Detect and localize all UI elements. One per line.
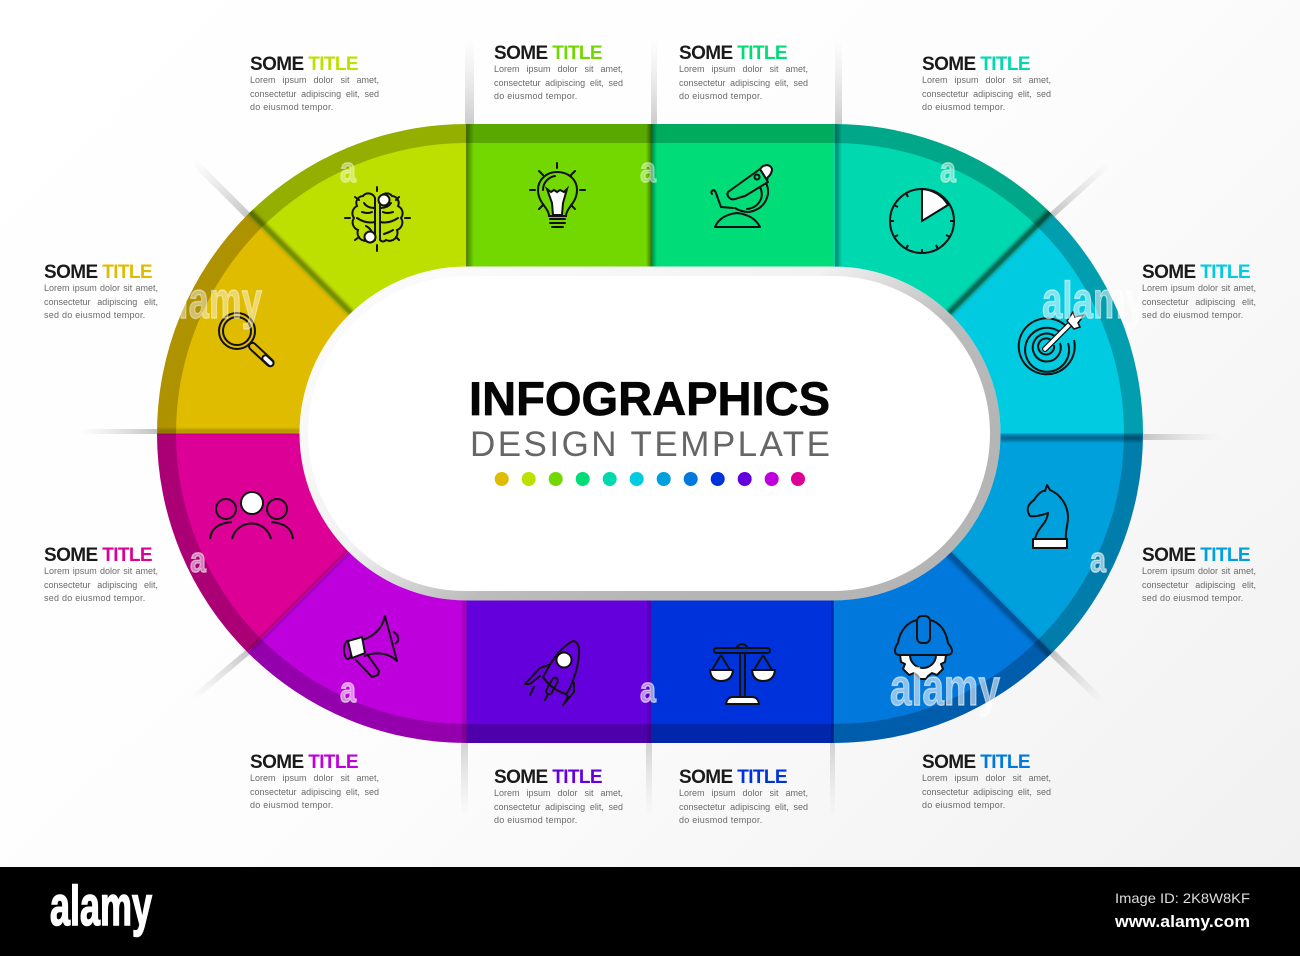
footer bar: www.alamy.com — [1114, 912, 1250, 931]
text block: royal blue — [679, 767, 808, 825]
segment 6: cyan — [952, 215, 1143, 434]
heading: DESIGN TEMPLATE — [470, 425, 830, 464]
text block: teal: do eiusmod tempor. — [922, 102, 1006, 112]
text block: magenta: Lorem ipsum dolor sit amet, — [44, 566, 158, 576]
text block: cyan — [1142, 262, 1256, 320]
outer shadow streaks — [80, 40, 1220, 818]
text block: emerald: consectetur adipiscing elit, sed — [679, 78, 808, 88]
text block: emerald: SOME TITLE — [679, 43, 787, 64]
text block: violet: SOME TITLE — [494, 767, 602, 788]
watermarks: a — [640, 149, 657, 190]
icon: brain — [345, 187, 410, 251]
watermarks: a — [1090, 539, 1107, 580]
text block: lime: do eiusmod tempor. — [250, 102, 334, 112]
segment 9: royal blue — [651, 600, 834, 743]
text block: emerald: Lorem ipsum dolor sit amet, — [679, 64, 808, 74]
text block: royal blue: consectetur adipiscing elit, sed — [679, 802, 808, 812]
text block: green: do eiusmod tempor. — [494, 91, 578, 101]
text block: purple: do eiusmod tempor. — [250, 800, 334, 810]
watermarks: alamy — [158, 272, 262, 330]
icon: clock — [890, 189, 954, 253]
text block: lime: SOME TITLE — [250, 54, 358, 75]
text block: magenta: SOME TITLE — [44, 545, 152, 566]
text block: yellow — [44, 262, 158, 320]
text block: royal blue: Lorem ipsum dolor sit amet, — [679, 788, 808, 798]
text block: cyan: Lorem ipsum dolor sit amet, — [1142, 283, 1256, 293]
colour dots — [495, 472, 805, 486]
text block: lime: consectetur adipiscing elit, sed — [250, 88, 379, 98]
text block: purple — [250, 752, 379, 810]
text block: green: consectetur adipiscing elit, sed — [494, 78, 623, 88]
text block: emerald — [679, 43, 808, 101]
icon: scales — [710, 644, 775, 704]
watermarks — [158, 149, 1146, 717]
text block: lime — [250, 54, 379, 112]
text block: magenta — [44, 545, 158, 603]
text block: blue: consectetur adipiscing elit, sed — [922, 786, 1051, 796]
text block: green: Lorem ipsum dolor sit amet, — [494, 64, 623, 74]
icon: target and arrow — [1019, 312, 1084, 374]
watermarks: a — [940, 149, 957, 190]
icon: light bulb — [530, 163, 585, 227]
text block: blue — [922, 752, 1051, 810]
text block: violet: Lorem ipsum dolor sit amet, — [494, 788, 623, 798]
text block: purple: SOME TITLE — [250, 752, 358, 773]
watermarks: a — [340, 669, 357, 710]
footer bar: Image ID: 2K8W8KF — [1115, 890, 1250, 906]
text block: royal blue: do eiusmod tempor. — [679, 815, 763, 825]
segment 12: magenta — [157, 434, 348, 652]
text block: yellow: consectetur adipiscing elit, — [44, 296, 158, 306]
central white pill — [308, 276, 990, 591]
footer bar — [0, 867, 1300, 956]
heading — [469, 372, 830, 464]
segment 2: lime — [248, 124, 466, 315]
text block: teal: SOME TITLE — [922, 54, 1030, 75]
icon: magnifier — [219, 313, 275, 368]
segment 11: purple — [248, 552, 466, 743]
text block: violet: do eiusmod tempor. — [494, 815, 578, 825]
text block: sky blue: sed do eiusmod tempor. — [1142, 593, 1244, 603]
text block: blue: Lorem ipsum dolor sit amet, — [922, 773, 1051, 783]
text block: yellow: Lorem ipsum dolor sit amet, — [44, 283, 158, 293]
text block: sky blue: SOME TITLE — [1142, 545, 1250, 566]
icon: helmet and gear — [895, 616, 952, 679]
text block: teal: consectetur adipiscing elit, sed — [922, 88, 1051, 98]
footer bar: alamy — [50, 874, 152, 937]
text block: teal — [922, 54, 1051, 112]
text block: purple: consectetur adipiscing elit, sed — [250, 786, 379, 796]
text block: lime: Lorem ipsum dolor sit amet, — [250, 75, 379, 85]
icon: chess knight — [1028, 485, 1068, 548]
text block: cyan: consectetur adipiscing elit, — [1142, 296, 1256, 306]
heading: INFOGRAPHICS — [469, 372, 830, 425]
icon: megaphone — [344, 616, 398, 677]
text block: blue: do eiusmod tempor. — [922, 800, 1006, 810]
inner pill shadow recess — [300, 266, 1001, 600]
text block: blue: SOME TITLE — [922, 752, 1030, 773]
text block: yellow: SOME TITLE — [44, 262, 152, 283]
text block: green — [494, 43, 623, 101]
watermarks: alamy — [1042, 272, 1146, 330]
text block: teal: Lorem ipsum dolor sit amet, — [922, 75, 1051, 85]
watermarks: a — [640, 669, 657, 710]
segment 1: yellow — [157, 215, 348, 434]
segment 4: emerald — [651, 124, 834, 266]
text block: violet — [494, 767, 623, 825]
watermarks: alamy — [890, 659, 1000, 717]
text block: cyan: sed do eiusmod tempor. — [1142, 310, 1244, 320]
text block: green: SOME TITLE — [494, 43, 602, 64]
text block: yellow: sed do eiusmod tempor. — [44, 310, 146, 320]
segment 7: sky blue — [952, 434, 1143, 652]
segment 3: green — [466, 124, 651, 266]
icon: rocket — [525, 641, 579, 705]
darker outer band — [157, 124, 1143, 743]
segment 5: teal — [834, 124, 1052, 315]
text block: sky blue: Lorem ipsum dolor sit amet, — [1142, 566, 1256, 576]
segment 10: violet — [466, 600, 651, 743]
segment junction shadows — [157, 124, 1143, 743]
icon: people — [210, 492, 293, 539]
watermarks: a — [340, 149, 357, 190]
text block: cyan: SOME TITLE — [1142, 262, 1250, 283]
icon: microscope — [711, 165, 772, 227]
text block: emerald: do eiusmod tempor. — [679, 91, 763, 101]
text block: magenta: sed do eiusmod tempor. — [44, 593, 146, 603]
text block: sky blue: consectetur adipiscing elit, — [1142, 580, 1256, 590]
segment 8: blue — [834, 552, 1052, 743]
text block: royal blue: SOME TITLE — [679, 767, 787, 788]
text block: magenta: consectetur adipiscing elit, — [44, 580, 158, 590]
text block: violet: consectetur adipiscing elit, sed — [494, 802, 623, 812]
text block: sky blue — [1142, 545, 1256, 603]
text block: purple: Lorem ipsum dolor sit amet, — [250, 773, 379, 783]
watermarks: a — [190, 539, 207, 580]
